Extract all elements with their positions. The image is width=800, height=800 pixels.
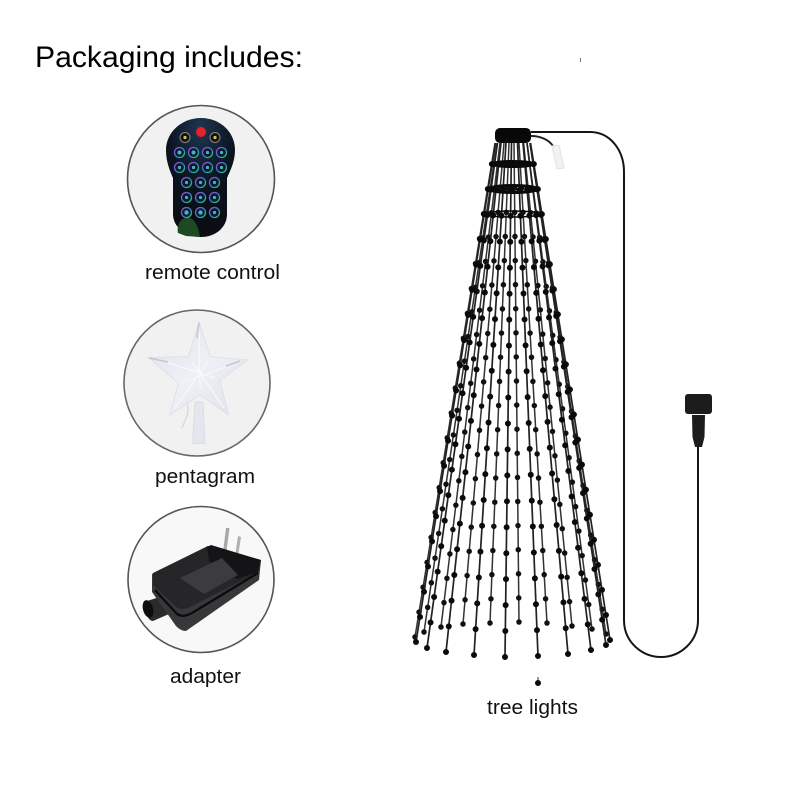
pentagram circle <box>124 310 270 456</box>
panel: adapter <box>128 506 274 652</box>
label: remote control: remote control <box>145 262 280 284</box>
panel: remote control <box>128 106 274 252</box>
icon: power adapter <box>141 528 261 631</box>
cable connector <box>685 394 712 447</box>
label: pentagram: pentagram <box>155 466 255 488</box>
chart: tree lights <box>415 128 610 686</box>
icon: star tree topper <box>148 322 248 444</box>
front strands <box>416 143 610 657</box>
back strand bulbs <box>415 143 606 637</box>
front strand bulbs <box>416 143 610 657</box>
panel: pentagram <box>124 310 270 456</box>
title: Packaging includes: <box>35 41 303 74</box>
adapter circle <box>128 506 274 652</box>
loose bulb dot <box>535 680 541 686</box>
label: tree lights: tree lights <box>487 697 578 719</box>
small speck <box>580 58 581 62</box>
top cap <box>495 128 531 143</box>
power cable <box>531 132 698 657</box>
white plug and wire <box>531 136 564 169</box>
loose bulb <box>537 677 539 683</box>
icon: remote control <box>166 118 235 237</box>
label: adapter: adapter <box>170 666 241 688</box>
back strands <box>415 143 606 637</box>
remote circle <box>128 106 274 252</box>
upper rings <box>485 162 541 217</box>
